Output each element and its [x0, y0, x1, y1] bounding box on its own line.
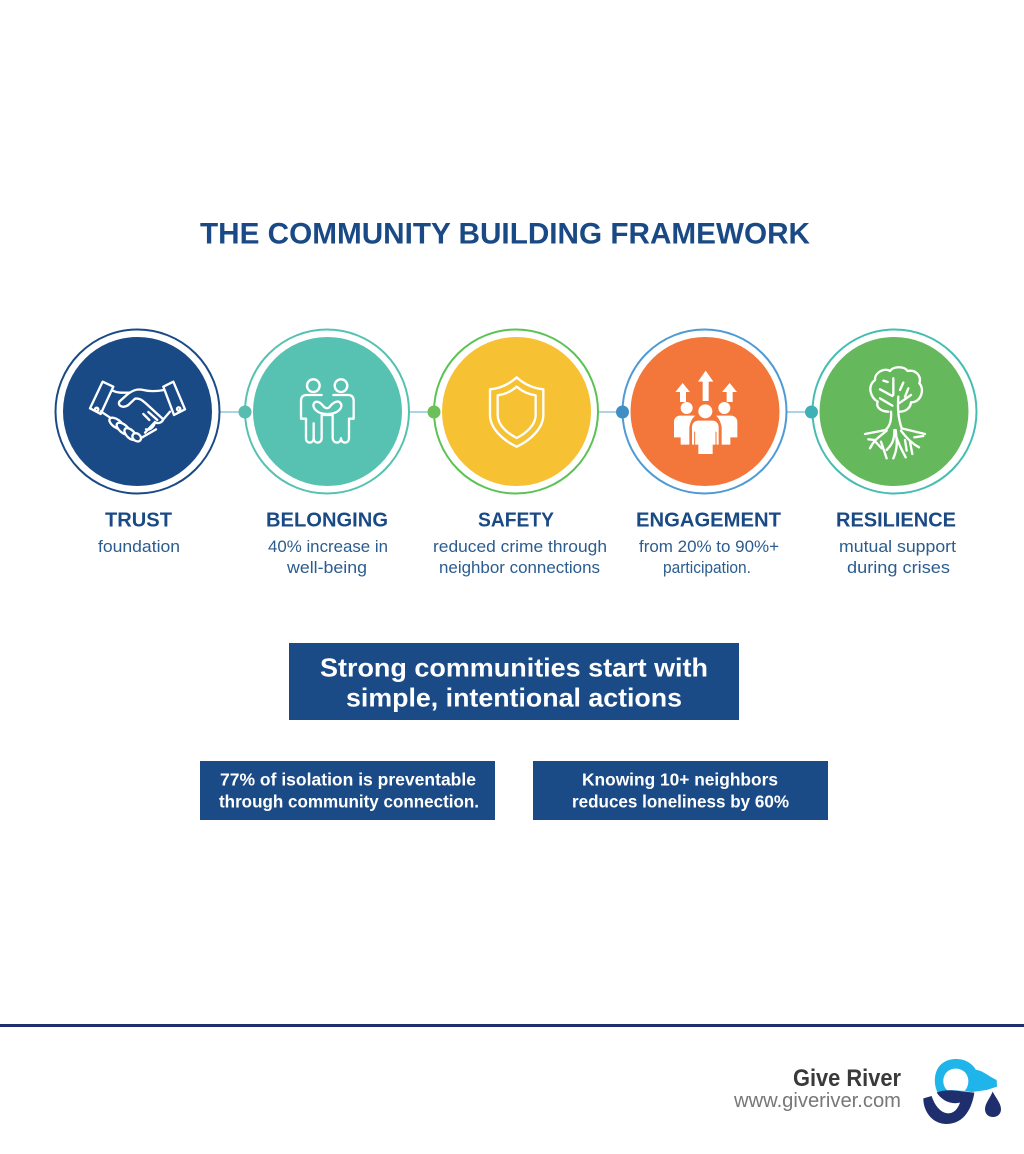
engagement label: ENGAGEMENT: [636, 510, 781, 532]
trust label: TRUST: [105, 510, 172, 532]
banner: key message: Strong communities start with: [320, 652, 708, 682]
belonging description: 40% increase in: [268, 538, 388, 556]
safety description: neighbor connections: [439, 559, 600, 577]
icon: shield: [490, 377, 543, 447]
engagement description: participation.: [663, 559, 751, 577]
icon: tree with roots: [865, 367, 925, 458]
icon: handshake: [90, 382, 185, 443]
connector lines: [220, 411, 812, 413]
trust circle: [56, 330, 220, 494]
step: resilience: [812, 330, 976, 577]
callout: isolation stat: [200, 761, 495, 820]
safety circle: [434, 330, 598, 494]
resilience label: RESILIENCE: [836, 510, 956, 532]
callout: neighbors stat: Knowing 10+ neighbors: [582, 770, 778, 790]
safety label: SAFETY: [478, 510, 555, 532]
belonging label: BELONGING: [266, 510, 388, 532]
callout: isolation stat: 77% of isolation is preventable: [220, 770, 476, 790]
step: belonging: [245, 330, 409, 577]
resilience description: mutual support: [839, 538, 956, 556]
callout: neighbors stat: [533, 761, 828, 820]
resilience circle: [812, 330, 976, 494]
step: safety: [433, 330, 607, 577]
trust description: foundation: [98, 538, 180, 556]
icon: Give River logo: [923, 1059, 1001, 1124]
safety description: reduced crime through: [433, 538, 607, 556]
step: trust: [56, 330, 220, 556]
belonging description: well-being: [286, 559, 367, 577]
connector dots: [238, 406, 818, 418]
footer rule: [0, 1024, 1024, 1027]
title: THE COMMUNITY BUILDING FRAMEWORK: [200, 218, 810, 250]
footer url: www.giveriver.com: [733, 1090, 901, 1112]
engagement description: [639, 538, 779, 577]
belonging circle: [245, 330, 409, 494]
banner: key message: [289, 643, 739, 720]
step: engagement: [622, 330, 786, 577]
icon: people with arrows: [674, 371, 737, 454]
footer brand name: Give River: [793, 1065, 901, 1092]
callout: neighbors stat: reduces loneliness by 60%: [572, 792, 789, 812]
resilience description: during crises: [847, 559, 950, 577]
callout: isolation stat: through community connection.: [219, 792, 479, 812]
resilience description: [839, 538, 956, 577]
belonging description: [268, 538, 388, 577]
banner: key message: simple, intentional actions: [346, 682, 682, 712]
icon: two people holding hands: [301, 379, 354, 443]
engagement circle: [622, 330, 786, 494]
safety description: [433, 538, 607, 577]
engagement description: from 20% to 90%+: [639, 538, 779, 556]
